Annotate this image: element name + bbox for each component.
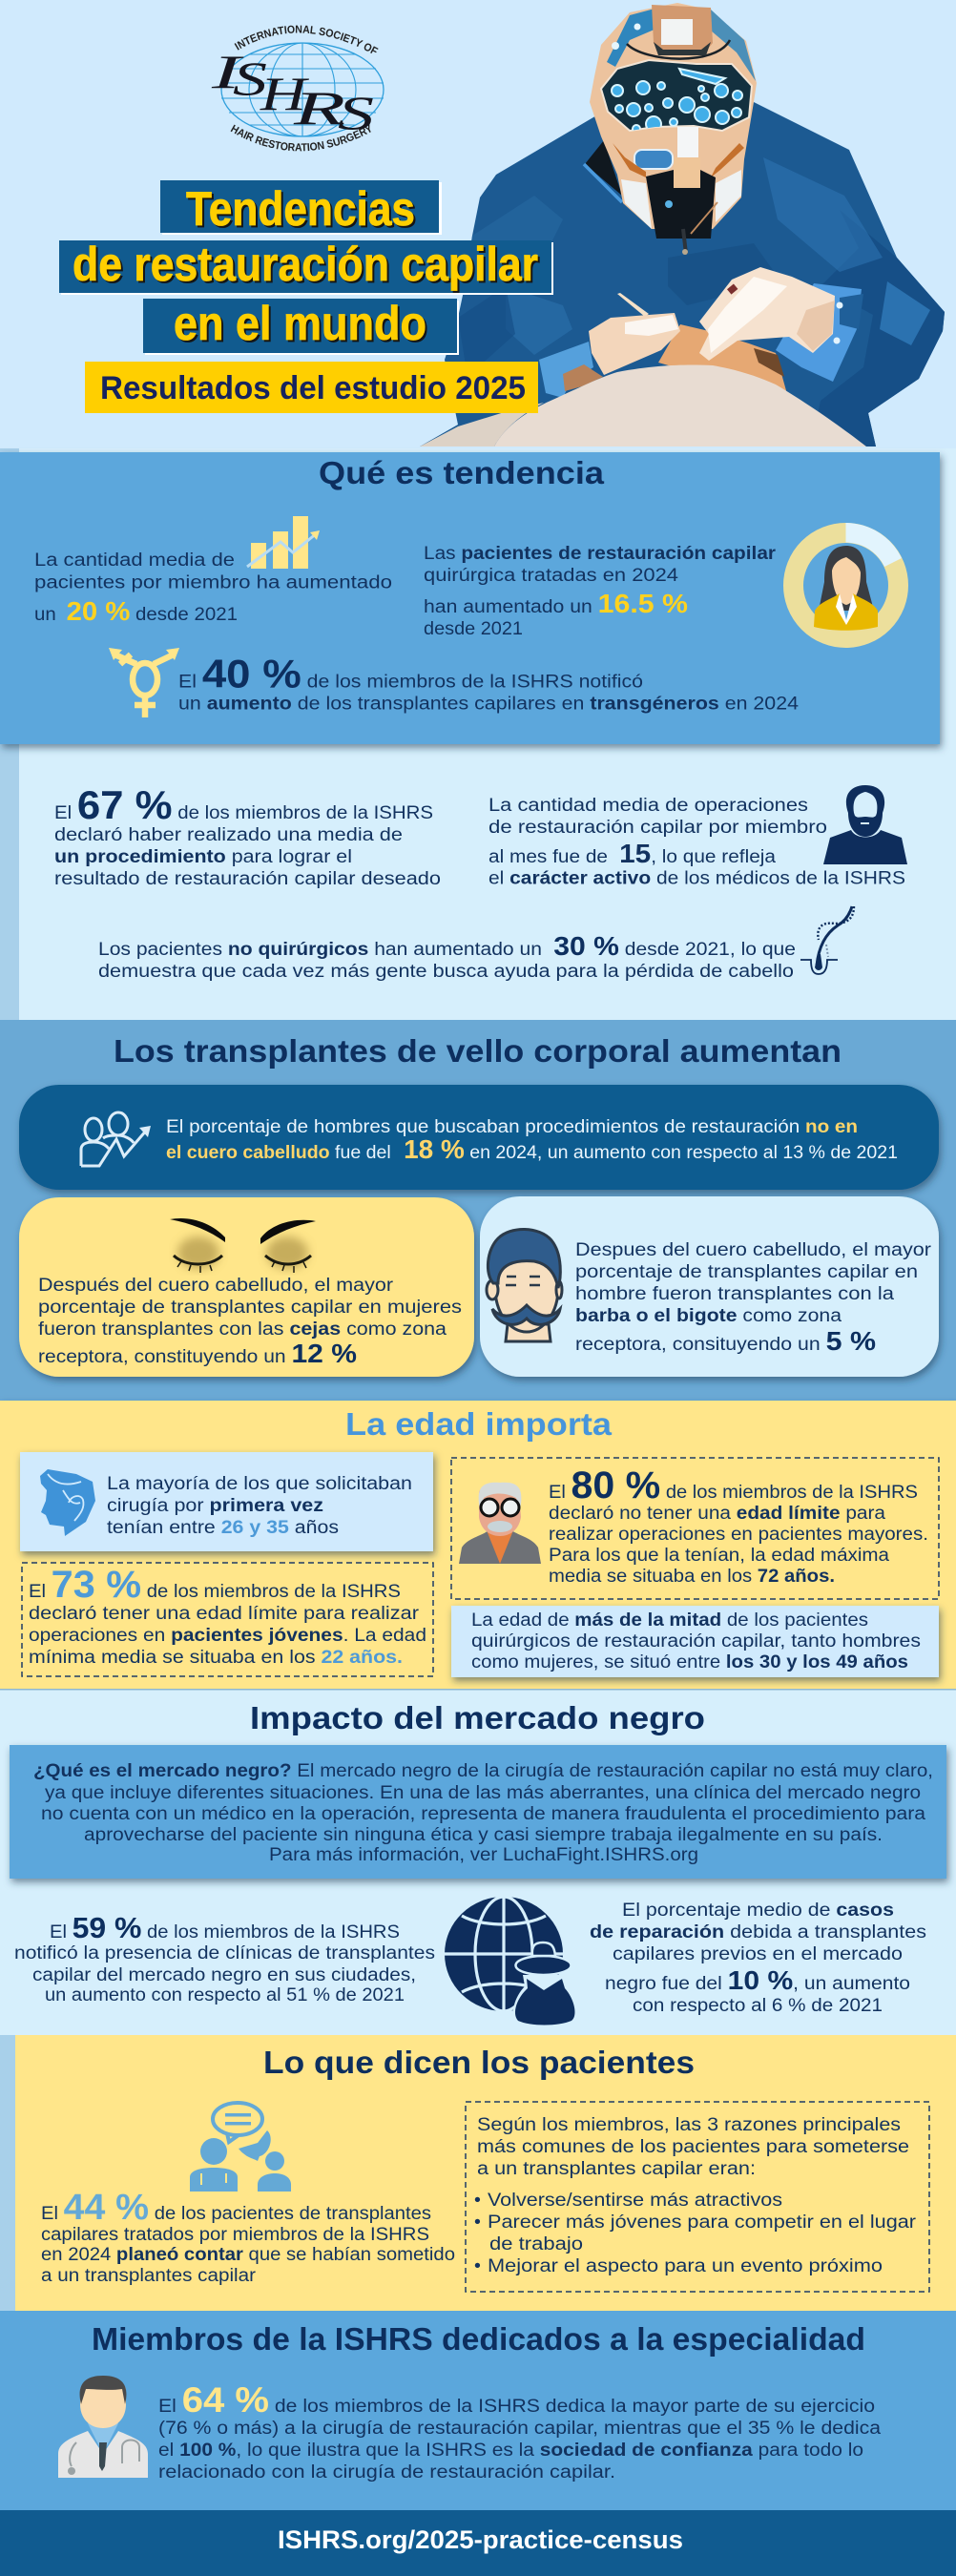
- heading: Lo que dicen los pacientes: [263, 2045, 695, 2080]
- box: age of patients: quirúrgicos de restauración capilar, tanto hombres: [471, 1631, 921, 1652]
- box: 73 percent: declaró tener una edad límite para realizar: [29, 1603, 420, 1624]
- text: 64 percent: El 64 % de los miembros de la ISHRS dedica la mayor parte de su ejercicio: [158, 2380, 875, 2420]
- card: eyebrows: Después del cuero cabelludo, el mayor: [38, 1275, 394, 1296]
- text: repair cases: negro fue del 10 %, un aumento: [605, 1965, 910, 1995]
- subtitle banner: [85, 362, 538, 413]
- text: patients per member: un 20 % desde 2021: [34, 596, 238, 626]
- title banner: de restauración capilar: de restauración capilar: [74, 239, 540, 293]
- text: female patients: Las pacientes de restauración capilar: [424, 543, 776, 564]
- heading: La edad importa: [345, 1406, 613, 1442]
- subtitle banner: Resultados del estudio 2025: [100, 370, 526, 406]
- text: 59 percent: El 59 % de los miembros de la ISHRS: [50, 1911, 400, 1944]
- right hand: [699, 267, 835, 361]
- box: 80 percent: media se situaba en los 72 años.: [549, 1566, 835, 1587]
- icon: people with arrow: [81, 1112, 151, 1166]
- box: what is the black market: ¿Qué es el mercado negro? El mercado negro de la cirugía de restauración capilar no está muy claro,: [33, 1760, 933, 1781]
- text: 59 percent: un aumento con respecto al 51 % de 2021: [45, 1984, 405, 2005]
- collar: [585, 140, 622, 196]
- logo arc text bottom: HAIR RESTORATION SURGERY: [231, 124, 371, 151]
- text: female patients: han aumentado un 16.5 %: [424, 589, 688, 618]
- footer: [0, 2510, 956, 2576]
- box: what is the black market: no cuenta con un médico en la operación, representa de manera fraudulenta el procedimiento para: [41, 1803, 925, 1824]
- box: first surgery: cirugía por primera vez: [107, 1495, 323, 1516]
- icon: rising bars: [247, 516, 320, 569]
- text: patients per member: La cantidad media de: [34, 550, 235, 571]
- logo letters: I: [210, 45, 244, 98]
- text: female patients: quirúrgica tratadas en 2024: [424, 565, 678, 586]
- sleeve cuffs: [539, 342, 593, 398]
- box: top 3 reasons: •: [474, 2190, 481, 2211]
- text: 40 percent transgender: [178, 651, 799, 714]
- box: top 3 reasons: •: [474, 2255, 481, 2276]
- text: repair cases: de reparación debida a transplantes: [590, 1922, 926, 1942]
- text: 40 percent transgender: un aumento de los transplantes capilares en transgéneros en 2024: [178, 693, 799, 714]
- text: patients per member: pacientes por miembro ha aumentado: [34, 572, 392, 593]
- text: 64 percent: [158, 2380, 881, 2483]
- icon: globe with money bag: [445, 1897, 576, 2027]
- box: 80 percent: declaró no tener una edad límite para: [549, 1503, 885, 1524]
- text: 67 percent: declaró haber realizado una media de: [54, 824, 403, 845]
- left hand: [589, 313, 680, 375]
- icon: transgender symbol: [109, 648, 179, 717]
- text: 67 percent: El 67 % de los miembros de la ISHRS: [54, 782, 433, 827]
- text: 64 percent: relacionado con la cirugía de restauración capilar.: [158, 2462, 615, 2483]
- logo letters: S: [338, 86, 374, 139]
- box: what is the black market: aprovecharse del paciente sin ninguna ética y casi siempre trabaja ilegalmente en su país.: [84, 1824, 883, 1845]
- heading: Miembros de la ISHRS dedicados a la especialidad: [92, 2321, 865, 2357]
- logo: ISHRS: [210, 25, 384, 151]
- box: 73 percent: mínima media se situaba en los 22 años.: [29, 1647, 403, 1668]
- box: first surgery: [20, 1452, 433, 1551]
- text: 40 percent transgender: El 40 % de los miembros de la ISHRS notificó: [178, 651, 643, 696]
- title banner: en el mundo: en el mundo: [176, 299, 428, 352]
- icon: bearded man: [823, 785, 907, 864]
- logo letters: H: [260, 67, 310, 120]
- panel: what patients say: [0, 2035, 956, 2312]
- text: repair cases: con respecto al 6 % de 2021: [633, 1995, 883, 2016]
- box: what is the black market: Para más información, ver LuchaFight.ISHRS.org: [269, 1844, 698, 1865]
- text: 44 percent: [41, 2188, 455, 2286]
- text: operations per month: de restauración capilar por miembro: [488, 817, 827, 838]
- panel: black market impact: [0, 1689, 956, 2036]
- box: top 3 reasons: Volverse/sentirse más atractivos: [488, 2190, 782, 2211]
- footer: ISHRS.org/2025-practice-census: [278, 2525, 683, 2554]
- box: 80 percent: [451, 1458, 939, 1599]
- head: [590, 3, 757, 229]
- box: what is the black market: ya que incluye diferentes situaciones. En una de las más aberrantes, una clínica del mercado negro: [45, 1782, 921, 1803]
- card: eyebrows: fueron transplantes con las cejas como zona: [38, 1319, 447, 1340]
- hero background: [0, 0, 956, 453]
- icon: hair follicle: [800, 906, 854, 974]
- scalpel: [617, 293, 649, 317]
- box: top 3 reasons: de trabajo: [489, 2233, 583, 2254]
- card: beard and moustache: hombre fueron transplantes con la: [575, 1283, 894, 1304]
- icon: moustached man: [487, 1229, 562, 1341]
- patterned cap: [601, 60, 752, 131]
- box: top 3 reasons: más comunes de los pacientes para someterse: [477, 2136, 909, 2157]
- box: age of patients: como mujeres, se situó entre los 30 y los 49 años: [471, 1652, 908, 1672]
- text: 64 percent: (76 % o más) a la cirugía de restauración capilar, mientras que el 35 % le dedica: [158, 2418, 881, 2439]
- panel: La edad importa: [0, 1401, 956, 1690]
- logo letters: R: [292, 81, 345, 135]
- hero illustration: surgeon: [420, 3, 945, 447]
- text: female patients: desde 2021: [424, 618, 523, 639]
- text: 67 percent: [54, 782, 441, 889]
- card: eyebrows: porcentaje de transplantes capilar en mujeres: [38, 1297, 462, 1318]
- box: 80 percent: Para los que la tenían, la edad máxima: [549, 1545, 889, 1566]
- box: first surgery: La mayoría de los que solicitaban: [107, 1473, 412, 1494]
- card: beard and moustache: [480, 1196, 939, 1377]
- text: operations per month: La cantidad media de operaciones: [488, 795, 808, 816]
- card: eyebrows: [19, 1197, 474, 1377]
- title banner: en el mundo: en el mundo: [174, 297, 426, 350]
- pill: men non-scalp: el cuero cabelludo fue del 18 % en 2024, un aumento con respecto al 13 % de 2021: [166, 1134, 898, 1164]
- heading: Qué es tendencia: [319, 455, 605, 490]
- text: 59 percent: capilar del mercado negro en sus ciudades,: [32, 1964, 416, 1985]
- logo letters: [210, 45, 374, 139]
- box: top 3 reasons: a un transplantes capilar eran:: [477, 2158, 756, 2179]
- card: eyebrows: receptora, constituyendo un 12 %: [38, 1339, 357, 1368]
- box: 73 percent: operaciones en pacientes jóvenes . La edad: [29, 1625, 426, 1646]
- pill: men non-scalp: El porcentaje de hombres que buscaban procedimientos de restauración no en: [166, 1116, 858, 1137]
- card: beard and moustache: receptora, consituyendo un 5 %: [575, 1326, 876, 1356]
- text: 44 percent: capilares tratados por miembros de la ISHRS: [41, 2224, 429, 2245]
- text: 59 percent: notificó la presencia de clínicas de transplantes: [14, 1942, 435, 1963]
- text: 67 percent: un procedimiento para lograr el: [54, 846, 352, 867]
- text: operations per month: al mes fue de 15, lo que refleja: [488, 839, 776, 868]
- heading: Impacto del mercado negro: [250, 1700, 705, 1735]
- title banner: Tendencias: Tendencias: [188, 184, 417, 238]
- logo arc text top: INTERNATIONAL SOCIETY OF: [235, 25, 378, 53]
- heading: Los transplantes de vello corporal aumentan: [114, 1033, 842, 1069]
- icon: doctor talking to patient: [190, 2103, 291, 2192]
- text: repair cases: El porcentaje medio de casos: [622, 1900, 894, 1921]
- text: non-surgical patients: [98, 931, 796, 982]
- text: 64 percent: el 100 %, lo que ilustra que la ISHRS es la sociedad de confianza para todo lo: [158, 2440, 863, 2461]
- panel: dedicated members: [0, 2311, 956, 2511]
- text: non-surgical patients: demuestra que cada vez más gente busca ayuda para la pérdida de cabello: [98, 961, 794, 982]
- icon: older man: [459, 1483, 541, 1564]
- icon: closed eyes with eyebrows: [170, 1218, 316, 1273]
- box: 80 percent: El 80 % de los miembros de la ISHRS: [549, 1465, 918, 1506]
- text: 59 percent: [14, 1911, 435, 2005]
- card: beard and moustache: porcentaje de transplantes capilar en: [575, 1261, 918, 1282]
- box: age of patients: La edad de más de la mitad de los pacientes: [471, 1610, 868, 1631]
- title banner: de restauración capilar: de restauración capilar: [73, 238, 538, 291]
- pill: men non-scalp: [19, 1085, 939, 1190]
- logo letters: S: [233, 52, 267, 105]
- text: patients per member: [34, 550, 392, 626]
- box: age of patients: [451, 1606, 939, 1677]
- box: top 3 reasons: Mejorar el aspecto para un evento próximo: [488, 2255, 883, 2276]
- text: operations per month: el carácter activo de los médicos de la ISHRS: [488, 868, 905, 889]
- text: 67 percent: resultado de restauración capilar deseado: [54, 868, 441, 889]
- text: 44 percent: en 2024 planeó contar que se habían sometido: [41, 2244, 455, 2265]
- box: top 3 reasons: Según los miembros, las 3 razones principales: [477, 2114, 901, 2135]
- text: operations per month: [488, 795, 905, 889]
- patient face: [658, 324, 787, 394]
- box: 80 percent: realizar operaciones en pacientes mayores.: [549, 1524, 928, 1545]
- box: first surgery: tenían entre 26 y 35 años: [107, 1517, 339, 1538]
- title banner: Tendencias: Tendencias: [186, 182, 415, 236]
- panel: body hair transplants: [0, 1020, 956, 1402]
- text: female patients: [424, 543, 776, 639]
- box: top 3 reasons: Parecer más jóvenes para competir en el lugar: [488, 2212, 917, 2233]
- card: beard and moustache: Despues del cuero cabelludo, el mayor: [575, 1239, 932, 1260]
- box: 73 percent: [22, 1563, 433, 1676]
- icon: blue head: [40, 1469, 95, 1536]
- icon: doctor: [58, 2376, 148, 2478]
- text: non-surgical patients: Los pacientes no quirúrgicos han aumentado un 30 % desde 2021, lo que: [98, 931, 796, 961]
- box: 73 percent: El 73 % de los miembros de la ISHRS: [29, 1564, 401, 1606]
- box: what is the black market: [10, 1745, 946, 1879]
- box: top 3 reasons: [466, 2102, 929, 2292]
- panel: Qué es tendencia: [0, 452, 940, 744]
- box: top 3 reasons: •: [474, 2212, 481, 2233]
- text: 44 percent: El 44 % de los pacientes de transplantes: [41, 2188, 431, 2228]
- visor strap: [677, 127, 698, 158]
- text: repair cases: capilares previos en el mercado: [613, 1943, 903, 1964]
- drape: [494, 365, 866, 447]
- section: lower trend background: [0, 448, 956, 1021]
- text: 44 percent: a un transplantes capilar: [41, 2265, 257, 2286]
- icon: woman in donut: [794, 523, 902, 637]
- card: beard and moustache: barba o el bigote como zona: [575, 1305, 842, 1326]
- text: repair cases: [590, 1900, 926, 2016]
